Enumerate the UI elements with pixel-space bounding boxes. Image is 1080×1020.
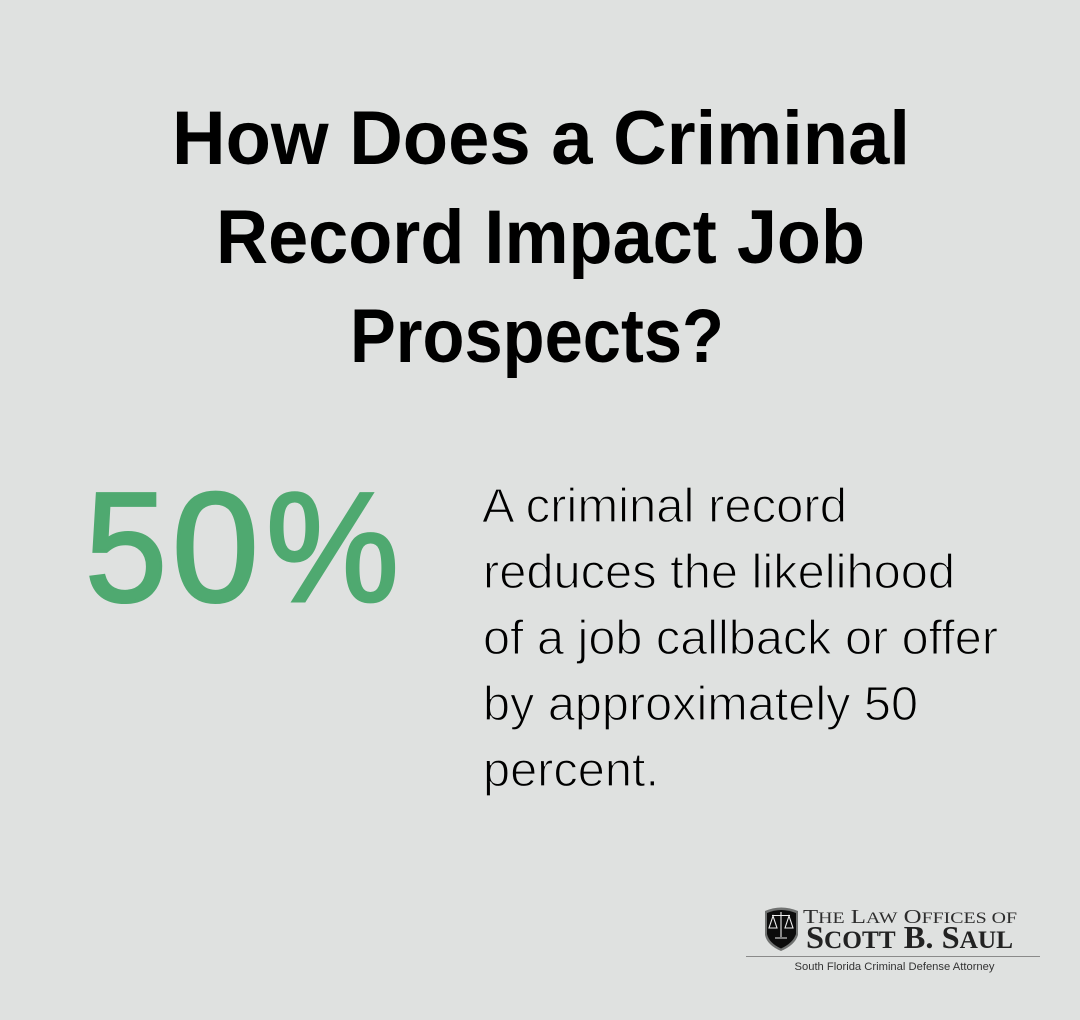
statistic: 50%: %	[266, 461, 399, 635]
logo divider	[746, 956, 1040, 957]
description text: reduces the likelihood	[483, 546, 955, 599]
logo tagline: South Florida Criminal Defense Attorney	[794, 961, 995, 973]
statistic: 50%: 5	[85, 461, 167, 635]
title: How Does a Criminal	[172, 96, 910, 181]
logo line: Scott B. Saul: SCOTT B. SAUL	[806, 919, 1013, 955]
description text: of a job callback or offer	[483, 612, 998, 665]
icon: shield with scales	[765, 908, 798, 951]
description text: percent.	[483, 744, 659, 797]
statistic: 50%	[85, 461, 399, 635]
description text: A criminal record	[482, 480, 847, 533]
statistic: 50%: 0	[172, 461, 259, 635]
title: Prospects?	[350, 294, 724, 379]
logo: The Law Offices of Scott B. Saul	[746, 906, 1040, 973]
logo line: The Law Offices of: THE L AW O FFICES OF	[803, 906, 1017, 928]
title	[172, 96, 910, 379]
title: Record Impact Job	[216, 195, 865, 280]
description text	[482, 480, 998, 797]
description text: by approximately 50	[483, 678, 918, 731]
